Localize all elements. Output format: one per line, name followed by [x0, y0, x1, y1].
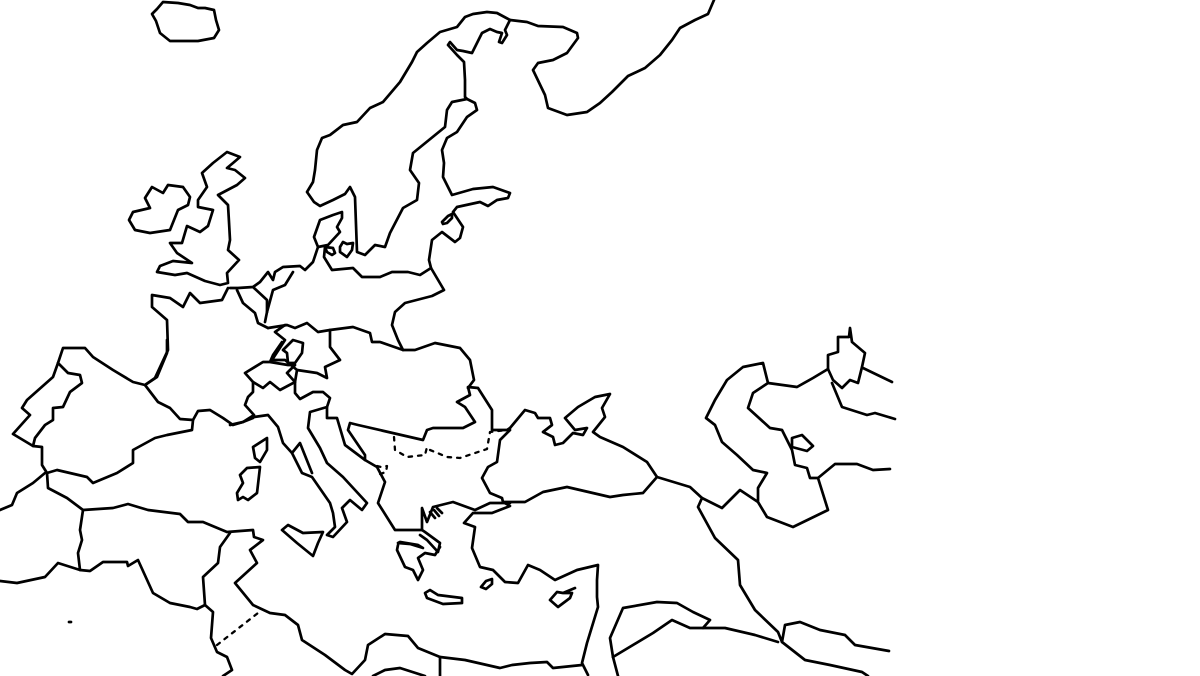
borders: north German coast and Low Countries — [230, 247, 431, 328]
island: Ireland — [129, 185, 190, 233]
landmass: North Africa — [0, 473, 582, 676]
borders: Persian Gulf and Near East — [657, 477, 889, 676]
landmass: Denmark and islands — [314, 212, 353, 257]
landmass: Greece and Peloponnese — [397, 542, 440, 580]
sea outline: Caspian Sea — [702, 363, 890, 527]
islands: Crete, Rhodes and Cyprus — [425, 579, 575, 607]
landmass: Italy — [230, 382, 367, 537]
island: Iceland — [152, 2, 219, 41]
sea outline: Black Sea — [464, 394, 657, 675]
landmass: Great Britain — [157, 152, 245, 285]
dashed borders: Balkans — [377, 430, 507, 474]
borders: central Europe — [268, 323, 474, 388]
sea outline: Aral Sea and rivers — [828, 328, 895, 419]
landmass: France — [145, 288, 228, 385]
landmass: Scandinavia and northern Russia coast — [307, 0, 714, 350]
islands: Corsica, Sardinia and Sicily — [237, 438, 323, 556]
borders: Switzerland — [245, 342, 295, 390]
borders: Balkans and Adriatic coast — [327, 387, 510, 552]
landmass: Arabia and Red Sea — [610, 602, 778, 676]
landmass: Iberian Peninsula — [13, 340, 253, 483]
